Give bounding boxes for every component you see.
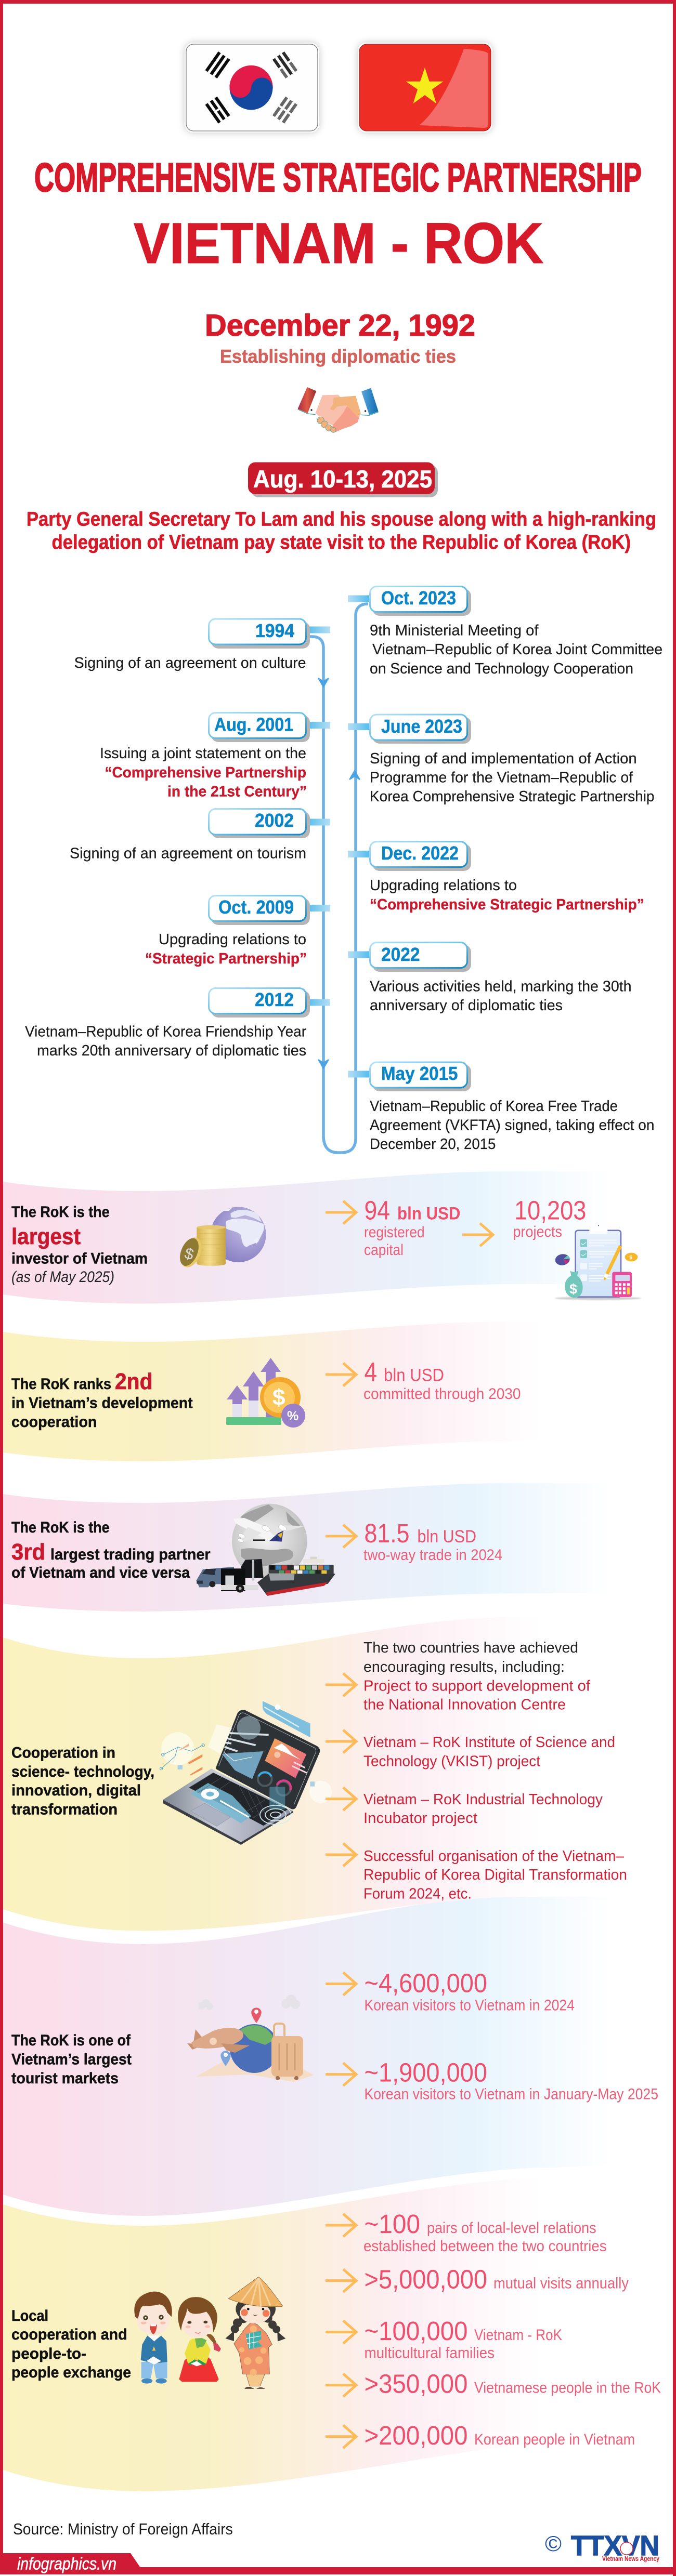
icon: project clipboard [554,1225,641,1300]
text: digital forum: Republic of Korea Digital Transformation [363,1867,627,1883]
timeline entry: Aug. 2001: Aug. 2001 [214,714,293,735]
heading: 3rd trading partner: largest trading partner [50,1546,211,1563]
heading: 3rd trading partner: of Vietnam and vice versa [11,1564,190,1581]
timeline entry: Aug. 2001: in the 21st Century” [167,784,307,800]
arrow [326,2269,356,2292]
stat: multicultural families: ~100,000 [364,2316,468,2346]
panel: trading partner [11,1504,502,1596]
arrow [462,1223,493,1246]
stat: two-way trade: two-way trade in 2024 [363,1547,502,1564]
timeline entry: Oct. 2009: Upgrading relations to [159,931,306,948]
heading: 3rd trading partner: 3rd [11,1539,45,1565]
stat: local relations: pairs of local-level relations [427,2220,596,2237]
panel: tourist markets [11,1969,658,2103]
heading: ranks 2nd: 2nd [115,1369,153,1394]
heading: ranks 2nd [11,1369,193,1431]
icon: laptop [160,1701,332,1845]
heading: science technology: innovation, digital [11,1782,141,1799]
ribbon: science and technology [3,1617,673,1931]
footer band: infographics.vn [17,2554,116,2573]
timeline entry: 2002 [70,809,330,862]
stat: visitors 2024: ~4,600,000 [364,1969,487,1998]
heading: science technology [11,1744,154,1818]
timeline entry: Oct. 2009: Oct. 2009 [218,896,294,918]
stat: two-way trade [363,1518,502,1564]
arrow [326,2214,356,2237]
timeline left column [25,619,330,1059]
stat: projects: projects [513,1223,562,1240]
intro text: delegation of Vietnam pay state visit to the Republic of Korea (RoK) [52,532,631,553]
heading: largest investor [11,1204,148,1286]
timeline entry: 2022: 2022 [381,944,420,965]
timeline entry: Dec. 2022: Dec. 2022 [381,842,459,864]
text: VKIST: Vietnam – RoK Institute of Science and [363,1734,615,1751]
stat: registered capital [364,1195,461,1259]
timeline entry: Dec. 2022: Upgrading relations to [370,877,517,894]
timeline entry: Oct. 2009: “Strategic Partnership” [145,950,307,967]
arrow [326,2321,356,2344]
logo: TTXVN: TTXVN [571,2530,659,2561]
timeline entry: 2022: Various activities held, marking the 30th [370,978,632,995]
date heading: Establishing diplomatic ties [220,346,456,367]
heading: science technology: Cooperation in [11,1744,115,1762]
heading: local cooperation: cooperation and [11,2326,127,2343]
heading: science technology: transformation [11,1801,118,1818]
stat: committed: 4 [364,1357,377,1387]
panel: largest investor [11,1195,641,1300]
footer band [0,2553,676,2574]
timeline entry: Aug. 2001 [100,713,330,800]
stat: projects: 10,203 [514,1195,587,1225]
stat: committed [363,1357,521,1403]
stat: visitors 2025 [364,2058,658,2103]
stat: Vietnamese people in the RoK: >350,000 [364,2369,468,2399]
icon: growth arrows and coin: $ [272,1385,285,1410]
timeline entry: 1994 [74,619,330,671]
timeline entry: Oct. 2023: on Science and Technology Cooperation [370,660,633,677]
heading: science technology: science- technology, [11,1763,154,1780]
icon: coins and globe [176,1207,266,1271]
timeline entry: Oct. 2009 [145,896,330,967]
stat: projects [513,1195,587,1240]
panel: development cooperation [11,1357,521,1431]
heading: local cooperation: Local [11,2307,48,2324]
stat: two-way trade: bln USD [417,1527,476,1547]
arrow [326,1201,356,1224]
heading: largest investor: largest [11,1224,81,1249]
stat: registered capital: bln USD [397,1204,461,1223]
ribbon: tourist markets [3,1897,673,2216]
timeline entry: May 2015: Agreement (VKFTA) signed, taking effect on [370,1117,654,1133]
heading: 3rd trading partner [11,1519,211,1581]
icon: project clipboard: $ [569,1281,577,1297]
heading: 3rd trading partner: The RoK is the [11,1519,110,1536]
stat: two-way trade: 81.5 [364,1518,410,1548]
stat: Vietnamese people in the RoK [364,2369,661,2399]
arrow [326,1973,356,1996]
icon: coins and globe: $ [183,1245,196,1264]
stat: Korean people in Vietnam: Korean people in Vietnam [474,2431,635,2448]
timeline entry: 2012 [25,988,330,1059]
heading: largest investor: The RoK is the [11,1204,110,1221]
icon: South Korean flag [186,44,318,131]
text: innovation centre [363,1678,591,1713]
timeline entry: June 2023: June 2023 [381,716,462,737]
timeline entry: 2002: Signing of an agreement on tourism [70,845,306,862]
arrow [326,1843,356,1866]
heading: ranks 2nd: in Vietnam’s development [11,1395,193,1412]
timeline entry: 2012: 2012 [255,989,294,1010]
stat: mutual visits [364,2264,629,2294]
logo: TTXVN: © [545,2531,562,2556]
stat: local relations: established between the two countries [363,2238,606,2255]
stat: committed: bln USD [384,1366,444,1385]
stat: multicultural families: multicultural families [364,2344,495,2361]
stat: registered capital: registered [364,1224,425,1241]
date heading: December 22, 1992 [205,309,475,342]
timeline entry: 2012: Vietnam–Republic of Korea Friendship Year [25,1024,306,1040]
timeline entry: June 2023: Korea Comprehensive Strategic Partnership [370,788,654,805]
text: digital forum: Forum 2024, etc. [363,1886,472,1903]
heading: tourist markets: The RoK is one of [11,2032,131,2049]
arrow [326,2063,356,2086]
stat: Korean people in Vietnam: >200,000 [364,2421,468,2450]
stat: visitors 2025: ~1,900,000 [364,2058,487,2088]
stat: registered capital: 94 [364,1195,390,1225]
text: incubator: Incubator project [363,1810,477,1827]
timeline entry: 1994: 1994 [255,620,294,641]
arrow [326,1673,356,1696]
timeline entry: 2002: 2002 [255,810,294,831]
stat: local relations: ~100 [364,2209,420,2239]
arrow [326,2374,356,2397]
timeline entry: 2012: marks 20th anniversary of diplomatic ties [37,1042,306,1059]
stat: local relations [363,2209,606,2255]
arrow [326,1788,356,1811]
timeline entry: Oct. 2023: Oct. 2023 [381,587,456,609]
heading: ranks 2nd: The RoK ranks [11,1376,111,1393]
arrow [326,1525,356,1548]
heading: local cooperation [11,2307,131,2381]
text: incubator: Vietnam – RoK Industrial Technology [363,1791,603,1808]
timeline entry: May 2015: Vietnam–Republic of Korea Free Trade [370,1098,618,1115]
icon: three children [134,2277,285,2389]
ribbon: largest investor [3,1171,673,1304]
ribbon: development cooperation [3,1322,673,1461]
timeline entry: June 2023: Signing of and implementation of Action [370,750,637,767]
timeline right column [348,586,662,1153]
logo: TTXVN: Vietnam News Agency [602,2555,660,2562]
timeline entry: 2022: anniversary of diplomatic ties [370,997,563,1014]
ribbon: trading partner [3,1483,673,1611]
heading: largest investor: investor of Vietnam [11,1250,148,1267]
timeline entry: Oct. 2023 [348,586,662,677]
text: innovation centre: Project to support development of [363,1678,591,1695]
timeline entry: Aug. 2001: Issuing a joint statement on the [100,745,306,762]
stat: committed: committed through 2030 [363,1385,521,1403]
timeline entry: Dec. 2022 [348,842,644,913]
icon: project clipboard: $ [629,1254,632,1260]
icon: growth arrows and coin: % [287,1409,298,1423]
source note: Source: Ministry of Foreign Affairs [13,2520,233,2538]
timeline entry: Aug. 2001: “Comprehensive Partnership [105,764,306,781]
stat: registered capital: capital [364,1241,404,1259]
text: intro results: The two countries have achieved [363,1640,578,1656]
timeline entry: June 2023 [348,715,654,805]
heading: largest investor: (as of May 2025) [11,1269,114,1286]
heading: tourist markets [11,2032,132,2087]
text: incubator [363,1791,603,1827]
heading: tourist markets: Vietnam’s largest [11,2051,132,2068]
timeline entry: June 2023: Programme for the Vietnam–Republic of [370,770,633,786]
timeline entry: Dec. 2022: “Comprehensive Strategic Partnership” [370,896,644,913]
arrow [326,2425,356,2448]
stat: visitors 2024: Korean visitors to Vietnam in 2024 [364,1997,575,2014]
stat: multicultural families: Vietnam - RoK [474,2327,562,2344]
text: intro results: encouraging results, including: [363,1659,565,1675]
ribbon: local cooperation [3,2177,673,2491]
stat: mutual visits: >5,000,000 [364,2264,487,2294]
text: digital forum [363,1848,627,1903]
title [34,154,642,275]
timeline entry: May 2015: December 20, 2015 [370,1136,496,1153]
arrow [326,1363,356,1386]
heading: local cooperation: people exchange [11,2364,131,2381]
date heading [205,309,475,367]
date badge: Aug. 10-13, 2025 [253,465,432,493]
timeline entry: May 2015: May 2015 [381,1063,458,1084]
heading: local cooperation: people-to- [11,2345,86,2362]
title: VIETNAM - ROK [134,212,543,275]
text: VKIST [363,1734,615,1770]
timeline entry: 1994: Signing of an agreement on culture [74,655,306,671]
intro text [27,508,656,553]
timeline entry: 2022 [348,943,632,1014]
icon: global trade transport [196,1504,335,1596]
arrow [326,1730,356,1753]
stat: multicultural families [364,2316,562,2361]
panel: science and technology [11,1640,627,1903]
text: innovation centre: the National Innovation Centre [363,1696,566,1713]
icon: handshake [298,387,379,432]
icon: growth arrows and coin [226,1358,305,1428]
stat: visitors 2024 [364,1969,575,2014]
heading: ranks 2nd: cooperation [11,1414,97,1431]
stat: mutual visits: mutual visits annually [493,2275,629,2292]
timeline entry: May 2015 [348,1062,654,1153]
timeline line with arrows [307,604,368,1153]
timeline entry: Oct. 2023: Vietnam–Republic of Korea Joint Committee [372,641,662,658]
heading: tourist markets: tourist markets [11,2070,119,2087]
panel: local cooperation [11,2209,661,2450]
text: VKIST: Technology (VKIST) project [363,1753,540,1770]
text: digital forum: Successful organisation of the Vietnam– [363,1848,625,1865]
icon: travel [187,1994,314,2082]
timeline entry: Oct. 2023: 9th Ministerial Meeting of [370,623,539,639]
text: intro results [363,1640,578,1675]
stat: Korean people in Vietnam [364,2421,635,2450]
icon: Vietnamese flag [359,44,491,131]
